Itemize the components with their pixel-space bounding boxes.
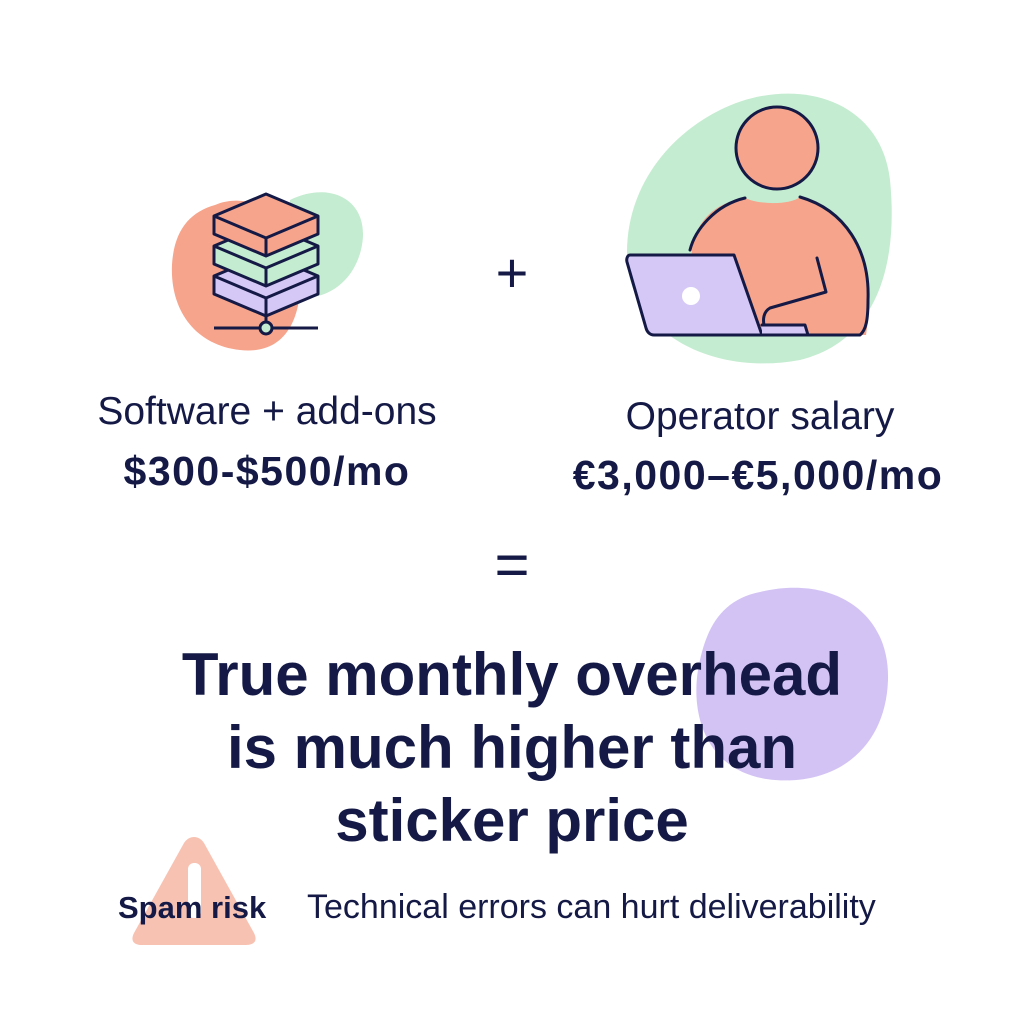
headline (182, 641, 842, 854)
icon: equals: = (494, 531, 530, 598)
headline: is much higher than (227, 714, 797, 781)
callout: spam risk (118, 837, 876, 945)
icon: server stack (172, 192, 363, 350)
text: software price: $300-$500/mo (124, 448, 410, 494)
headline: sticker price (335, 787, 689, 854)
icon: plus: + (496, 241, 528, 304)
text: software label: Software + add-ons (97, 390, 437, 433)
headline: True monthly overhead (182, 641, 842, 708)
text: description: Technical errors can hurt deliverability (307, 888, 876, 926)
text: operator label: Operator salary (626, 395, 894, 438)
text: operator price: €3,000–€5,000/mo (573, 452, 943, 498)
text: spam risk: Spam risk (118, 890, 266, 925)
icon: warning triangle (132, 837, 256, 945)
icon: operator at laptop (625, 94, 892, 364)
